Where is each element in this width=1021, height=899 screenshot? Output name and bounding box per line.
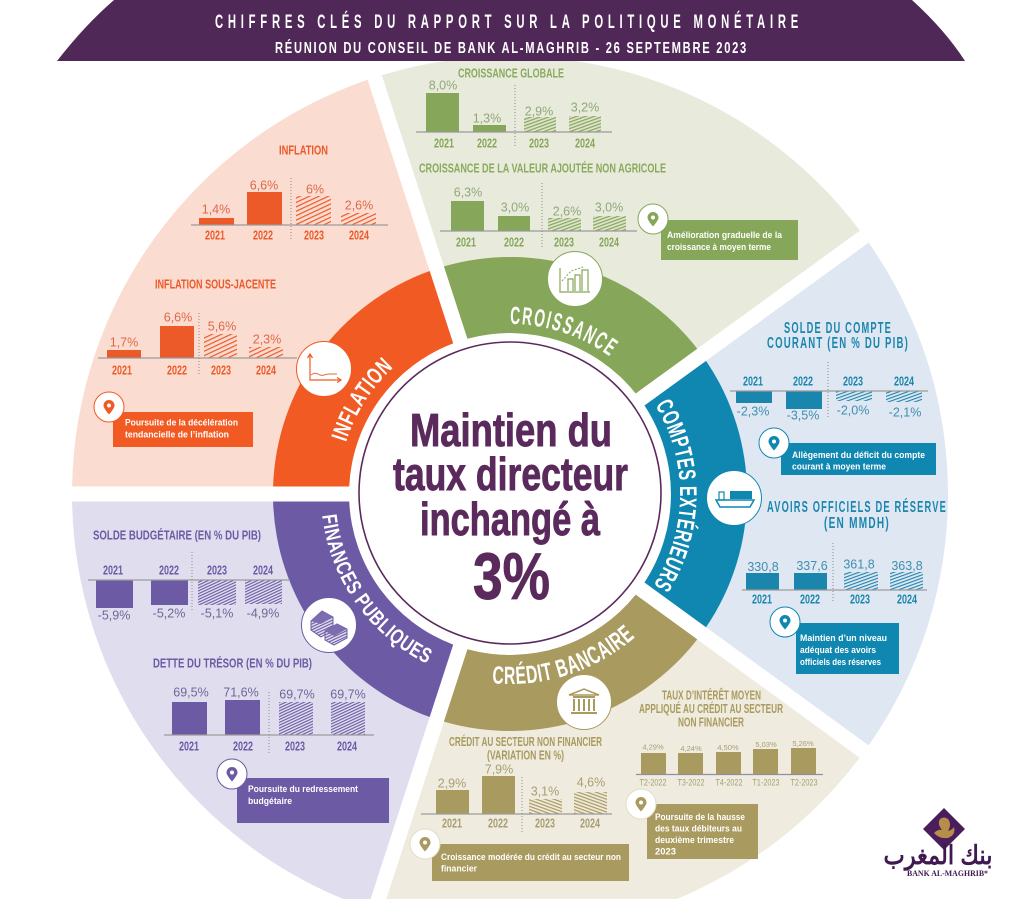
- bar chart: crédit au secteur non financier: 2024: [580, 816, 600, 830]
- callout: croissance: [661, 220, 798, 260]
- bar chart: solde budgétaire: 2022: [159, 564, 179, 578]
- callout: réserves: [796, 623, 899, 674]
- bar chart: inflation sous-jacente: 1,7%: [110, 336, 138, 350]
- heading: taux d'intérêt moyen: APPLIQUÉ AU CRÉDIT AU SECTEUR: [639, 701, 783, 716]
- sector background: croissance: [382, 0, 886, 438]
- central message: Maintien du: [410, 404, 612, 456]
- callout: crédit: [432, 844, 629, 881]
- bar chart: croissance globale: 8,0%: [429, 78, 457, 92]
- ring segment: comptes extérieurs: [560, 361, 833, 641]
- bar chart: crédit au secteur non financier: 7,9%: [485, 762, 513, 776]
- logo: Bank Al-Maghrib: [884, 808, 992, 878]
- icon: location pin: [770, 607, 800, 637]
- central message: [359, 342, 661, 644]
- bar chart: dette du trésor: 71,6%: [223, 686, 259, 700]
- bar chart: valeur ajoutée non agricole: 2023: [554, 236, 574, 250]
- bar chart: solde du compte courant: 2022: [793, 374, 813, 388]
- callout: croissance: Amélioration graduelle de la: [667, 230, 782, 240]
- bar chart: avoirs officiels de réserve: 361,8: [843, 558, 875, 572]
- sector background: finances publiques: [72, 502, 453, 899]
- bar chart: dette du trésor: 69,7%: [279, 688, 315, 702]
- callout: réserves: adéquat des avoirs: [800, 645, 876, 655]
- bar chart: solde budgétaire: [88, 552, 290, 622]
- bar chart: croissance globale: 2024: [575, 136, 595, 150]
- ring label: croissance: CROISSANCE: [510, 306, 619, 356]
- bar chart: crédit au secteur non financier: 3,1%: [531, 784, 559, 798]
- bar chart: crédit au secteur non financier: 2,9%: [438, 776, 466, 790]
- callout: compte courant: [781, 443, 936, 475]
- sector background: inflation: [72, 80, 453, 487]
- callout: inflation: tendancielle de l’inflation: [125, 430, 229, 440]
- bar chart: solde du compte courant: -2,1%: [889, 406, 921, 420]
- ring label: comptes extérieurs: COMPTES EXTÉRIEURS: [655, 400, 698, 592]
- heading: solde du compte courant: [767, 320, 909, 352]
- bar chart: croissance globale: 2023: [529, 136, 549, 150]
- bar chart: valeur ajoutée non agricole: 2022: [504, 236, 524, 250]
- bar chart: inflation: 2023: [304, 228, 324, 242]
- icon: location pin: [217, 759, 247, 789]
- icon: growth chart: [548, 252, 602, 306]
- bar chart: inflation sous-jacente: 6,6%: [164, 310, 192, 324]
- bar chart: solde budgétaire: 2021: [103, 564, 123, 578]
- callout: taux débiteurs: deuxième trimestre: [655, 835, 734, 845]
- heading: valeur ajoutée non agricole: CROISSANCE DE LA VALEUR AJOUTÉE NON AGRICOLE: [419, 160, 666, 176]
- heading: inflation: INFLATION: [279, 144, 328, 158]
- bar chart: inflation: 2021: [205, 228, 225, 242]
- bar chart: dette du trésor: 2023: [285, 740, 305, 754]
- callout: taux débiteurs: [647, 804, 758, 859]
- ring label: finances publiques: FINANCES PUBLIQUES: [322, 514, 432, 662]
- callout: taux débiteurs: Poursuite de la hausse: [655, 812, 745, 822]
- panel: comptes extérieurs: [644, 242, 948, 746]
- bar chart: inflation sous-jacente: 5,6%: [208, 320, 236, 334]
- callout: finances: [237, 778, 389, 823]
- sector background: crédit bancaire: [386, 595, 860, 899]
- ring segment: inflation: [273, 271, 453, 486]
- heading: taux d'intérêt moyen: [639, 688, 783, 730]
- bar chart: avoirs officiels de réserve: 2024: [897, 592, 917, 606]
- bar chart: solde budgétaire: -5,1%: [201, 606, 233, 620]
- icon: location pin: [410, 829, 440, 859]
- callout: inflation: Poursuite de la décélération: [125, 418, 238, 428]
- icon: location pin: [94, 392, 124, 422]
- bar chart: avoirs officiels de réserve: [742, 543, 927, 606]
- bar chart: solde du compte courant: -3,5%: [787, 408, 819, 422]
- bar chart: dette du trésor: 2022: [233, 740, 253, 754]
- bar chart: dette du trésor: 2021: [179, 740, 199, 754]
- bar chart: croissance globale: 2022: [477, 136, 497, 150]
- bar chart: inflation: [191, 178, 388, 242]
- bar chart: avoirs officiels de réserve: 2022: [800, 592, 820, 606]
- bar chart: inflation sous-jacente: [98, 310, 297, 378]
- heading: croissance globale: CROISSANCE GLOBALE: [458, 66, 564, 80]
- heading: solde budgétaire: SOLDE BUDGÉTAIRE (EN % DU PIB): [93, 528, 261, 542]
- bar chart: taux d'intérêt moyen: T2-2022: [640, 778, 666, 788]
- bar chart: inflation: 2024: [349, 228, 369, 242]
- bar chart: dette du trésor: 69,7%: [330, 688, 366, 702]
- sector background: comptes extérieurs: [560, 243, 1021, 796]
- icon: line chart: [296, 342, 352, 396]
- icon: location pin: [759, 428, 789, 458]
- logo: Bank Al-Maghrib: BANK AL-MAGHRIB*: [907, 868, 988, 878]
- bar chart: avoirs officiels de réserve: 2021: [752, 592, 772, 606]
- bar chart: taux d'intérêt moyen: 4,50%: [717, 743, 739, 752]
- bar chart: inflation: 1,4%: [202, 202, 230, 216]
- bar chart: avoirs officiels de réserve: 2023: [850, 592, 870, 606]
- bar chart: valeur ajoutée non agricole: 3,0%: [501, 200, 529, 214]
- bar chart: valeur ajoutée non agricole: 3,0%: [595, 200, 623, 214]
- bar chart: solde budgétaire: -5,2%: [153, 606, 185, 620]
- ring segment: finances publiques: [225, 479, 485, 717]
- callout: inflation: [113, 412, 253, 447]
- bar chart: taux d'intérêt moyen: T2-2023: [790, 778, 818, 788]
- ring segment: crédit bancaire: [425, 533, 697, 814]
- bar chart: avoirs officiels de réserve: 363,8: [891, 559, 923, 573]
- callout: compte courant: Allègement du déficit du compte: [792, 450, 925, 460]
- bar chart: croissance globale: [416, 78, 612, 150]
- bar chart: solde du compte courant: -2,0%: [837, 404, 869, 418]
- bar chart: taux d'intérêt moyen: 5,03%: [755, 740, 777, 749]
- panel: crédit bancaire: [386, 594, 860, 899]
- bar chart: croissance globale: 2,9%: [525, 104, 553, 118]
- bar chart: solde du compte courant: 2021: [743, 374, 763, 388]
- bar chart: avoirs officiels de réserve: 330,8: [747, 560, 779, 574]
- title banner: [57, 0, 965, 61]
- bar chart: dette du trésor: 69,5%: [173, 686, 209, 700]
- heading: dette du trésor: DETTE DU TRÉSOR (EN % DU PIB): [153, 656, 312, 670]
- ring label: crédit bancaire: CRÉDIT BANCAIRE: [493, 624, 635, 684]
- callout: taux débiteurs: 2023: [655, 846, 676, 856]
- bar chart: croissance globale: 1,3%: [473, 112, 501, 126]
- icon: location pin: [626, 789, 656, 819]
- bar chart: dette du trésor: 2024: [337, 740, 357, 754]
- bar chart: crédit au secteur non financier: 4,6%: [577, 776, 605, 790]
- heading: avoirs officiels de réserve: (EN MMDH): [824, 515, 890, 532]
- bar chart: taux d'intérêt moyen: T1-2023: [752, 778, 780, 788]
- bar chart: solde du compte courant: 2024: [894, 374, 914, 388]
- ring label: inflation: INFLATION: [331, 357, 392, 442]
- bar chart: solde budgétaire: 2023: [207, 564, 227, 578]
- callout: taux débiteurs: des taux débiteurs au: [655, 824, 742, 834]
- heading: crédit au secteur non financier: [449, 734, 602, 762]
- icon: money stacks: [302, 598, 356, 652]
- bar chart: inflation sous-jacente: 2023: [211, 364, 231, 378]
- bar chart: croissance globale: 3,2%: [571, 100, 599, 114]
- bar chart: solde budgétaire: -4,9%: [247, 606, 279, 620]
- callout: finances: Poursuite du redressement: [248, 784, 358, 794]
- heading: solde du compte courant: SOLDE DU COMPTE: [784, 320, 892, 337]
- icon: bank building: [556, 674, 612, 730]
- logo: Bank Al-Maghrib: بنك المغرب: [884, 840, 992, 871]
- bar chart: taux d'intérêt moyen: T4-2022: [716, 778, 742, 788]
- bar chart: taux d'intérêt moyen: 4,29%: [642, 742, 664, 752]
- bar chart: croissance globale: 2021: [434, 136, 454, 150]
- bar chart: inflation: 6,6%: [250, 178, 278, 192]
- bar chart: taux d'intérêt moyen: 5,26%: [792, 739, 814, 748]
- title banner: RÉUNION DU CONSEIL DE BANK AL-MAGHRIB - 26 SEPTEMBRE 2023: [275, 38, 748, 57]
- bar chart: solde du compte courant: 2023: [843, 374, 863, 388]
- bar chart: taux d'intérêt moyen: T3-2022: [678, 778, 704, 788]
- callout: réserves: Maintien d’un niveau: [800, 633, 887, 643]
- bar chart: valeur ajoutée non agricole: 2024: [599, 236, 619, 250]
- bar chart: inflation sous-jacente: 2,3%: [253, 332, 281, 346]
- ring segment: croissance: [444, 200, 705, 438]
- bar chart: inflation: 6%: [306, 182, 324, 196]
- heading: crédit au secteur non financier: (VARIATION EN %): [487, 748, 564, 762]
- bar chart: valeur ajoutée non agricole: 6,3%: [454, 186, 482, 200]
- bar chart: solde du compte courant: [730, 362, 928, 422]
- bar chart: valeur ajoutée non agricole: 2,6%: [553, 204, 581, 218]
- central message: taux directeur: [393, 448, 628, 500]
- bar chart: crédit au secteur non financier: 2022: [488, 816, 508, 830]
- panel: finances publiques: [72, 502, 454, 899]
- bar chart: inflation sous-jacente: 2021: [112, 364, 132, 378]
- bar chart: crédit au secteur non financier: 2023: [535, 816, 555, 830]
- callout: compte courant: courant à moyen terme: [792, 462, 886, 472]
- central message: inchangé à: [420, 493, 600, 545]
- heading: avoirs officiels de réserve: [767, 497, 947, 532]
- callout: réserves: officiels des réserves: [800, 657, 881, 667]
- central message: 3%: [473, 539, 550, 613]
- bar chart: crédit au secteur non financier: 2021: [442, 816, 462, 830]
- bar chart: inflation: 2022: [253, 228, 273, 242]
- bar chart: dette du trésor: [164, 686, 374, 754]
- bar chart: avoirs officiels de réserve: 337,6: [796, 559, 828, 573]
- bar chart: taux d'intérêt moyen: [636, 739, 823, 788]
- bar chart: crédit au secteur non financier: [421, 762, 612, 832]
- bar chart: valeur ajoutée non agricole: [440, 183, 637, 250]
- heading: solde du compte courant: COURANT (EN % DU PIB): [767, 335, 909, 352]
- callout: croissance: croissance à moyen terme: [667, 242, 771, 252]
- callout: crédit: financier: [441, 864, 478, 874]
- panel: croissance: [382, 61, 860, 394]
- callout: finances: budgétaire: [248, 796, 292, 806]
- heading: taux d'intérêt moyen: TAUX D’INTÉRÊT MOYEN: [662, 688, 761, 702]
- bar chart: solde budgétaire: -5,9%: [98, 608, 130, 622]
- bar chart: inflation: 2,6%: [345, 198, 373, 212]
- heading: taux d'intérêt moyen: NON FINANCIER: [678, 716, 744, 730]
- panel: inflation: [72, 80, 454, 486]
- bar chart: inflation sous-jacente: 2024: [256, 364, 276, 378]
- bar chart: valeur ajoutée non agricole: 2021: [456, 236, 476, 250]
- icon: cargo ship: [706, 470, 762, 526]
- bar chart: solde budgétaire: 2024: [253, 564, 273, 578]
- bar chart: solde du compte courant: -2,3%: [737, 404, 769, 418]
- heading: crédit au secteur non financier: CRÉDIT AU SECTEUR NON FINANCIER: [449, 734, 602, 749]
- bar chart: inflation sous-jacente: 2022: [167, 364, 187, 378]
- icon: location pin: [638, 204, 668, 234]
- heading: inflation sous-jacente: INFLATION SOUS-JACENTE: [155, 278, 276, 292]
- bar chart: taux d'intérêt moyen: 4,24%: [680, 744, 702, 753]
- callout: crédit: Croissance modérée du crédit au secteur non: [441, 852, 621, 862]
